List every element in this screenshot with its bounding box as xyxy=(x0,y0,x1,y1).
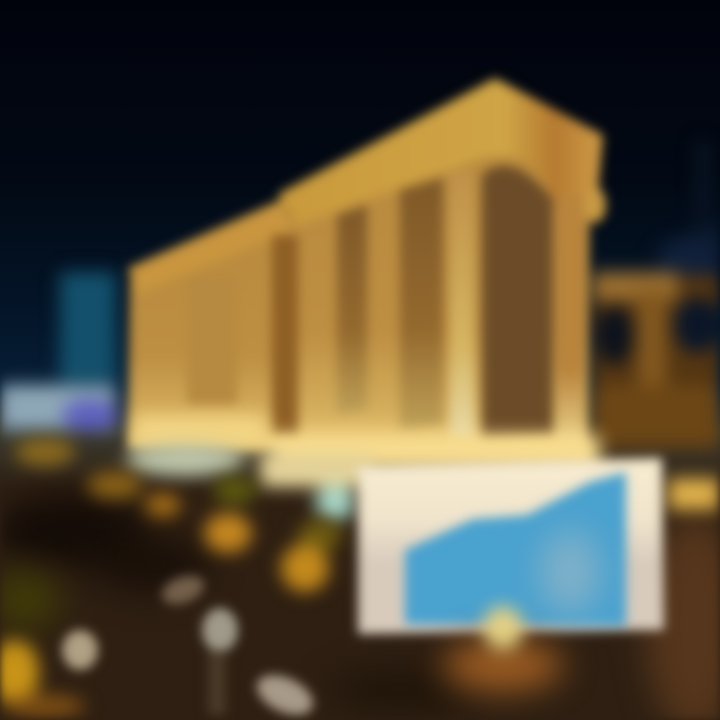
dark band xyxy=(272,235,298,435)
left wing window xyxy=(187,275,237,405)
billboard frame xyxy=(358,458,664,634)
window 3 xyxy=(337,205,367,415)
right column xyxy=(557,195,583,445)
left wing roof band xyxy=(128,198,290,295)
base glow xyxy=(135,415,600,470)
building: illuminated hotel xyxy=(128,78,606,470)
main roof band xyxy=(278,78,603,226)
billboard xyxy=(358,458,664,634)
ground shading xyxy=(0,495,720,720)
billboard blue area chart xyxy=(405,472,626,626)
lamp glow under billboard xyxy=(443,606,563,691)
window 2 xyxy=(400,178,443,430)
background tower: teal xyxy=(0,272,118,431)
olive tree shadow xyxy=(0,570,60,630)
arched window right xyxy=(482,166,553,438)
billboard lighter patch xyxy=(540,530,600,614)
building body xyxy=(128,78,606,455)
column xyxy=(450,170,474,440)
trees and street lights xyxy=(0,438,342,718)
street light band xyxy=(125,444,720,521)
right distant structure xyxy=(592,140,720,450)
capital xyxy=(584,187,606,223)
